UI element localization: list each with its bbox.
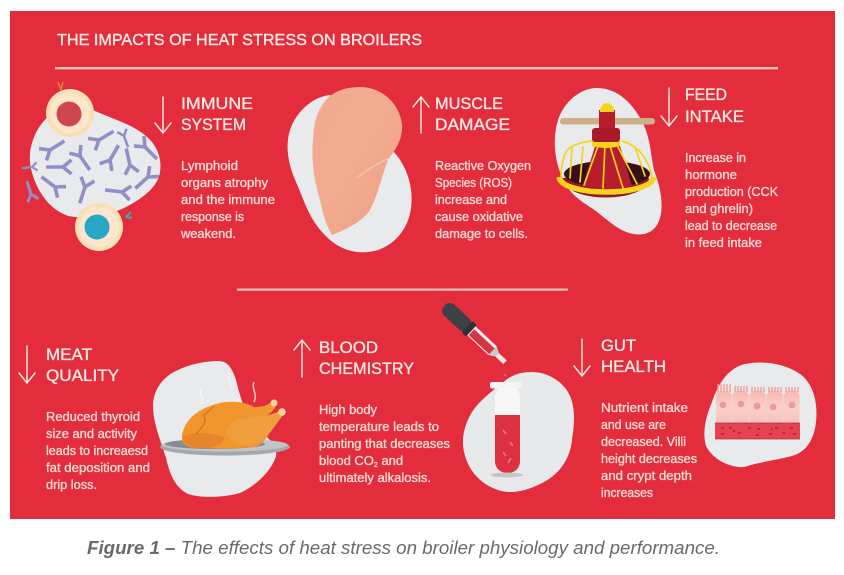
body text — [435, 159, 531, 241]
heading — [181, 95, 253, 134]
body text: leads to increaesd — [46, 444, 148, 458]
heading: QUALITY — [46, 367, 119, 385]
arrow up — [413, 97, 429, 133]
body text: High body — [319, 403, 378, 417]
body text: organs atrophy — [181, 176, 269, 190]
panel: immune system — [21, 82, 275, 251]
panel: feed intake — [555, 86, 779, 250]
body text: and use are — [601, 418, 666, 432]
body text: and crypt depth — [601, 469, 692, 483]
arrow down — [661, 88, 677, 126]
heading: INTAKE — [685, 108, 744, 126]
body text: drip loss. — [46, 478, 97, 492]
heading — [46, 346, 119, 385]
body text: height decreases — [601, 452, 697, 466]
heading: DAMAGE — [435, 116, 510, 134]
heading: HEALTH — [601, 358, 666, 376]
heading: SYSTEM — [181, 116, 246, 134]
heading: IMMUNE — [181, 95, 253, 113]
body text: temperature leads to — [319, 420, 439, 434]
body text: 2 — [374, 462, 378, 469]
body text: cause oxidative — [435, 210, 523, 224]
body text: ultimately alkalosis. — [319, 471, 431, 485]
body text: Increase in — [685, 151, 746, 165]
arrow down — [19, 346, 35, 383]
arrow down — [574, 339, 590, 376]
body text: weakend. — [180, 227, 236, 241]
heading: GUT — [601, 337, 636, 355]
body text: Species (ROS) — [435, 176, 512, 190]
illustration: poultry feeder — [555, 88, 662, 234]
heading: MUSCLE — [435, 95, 503, 113]
panel: meat quality — [19, 346, 290, 497]
body text: increases — [601, 486, 653, 500]
body text: Nutrient intake — [601, 401, 688, 415]
body text: and the immune — [181, 193, 275, 207]
heading — [435, 95, 510, 134]
body text — [319, 403, 450, 485]
heading — [685, 86, 744, 126]
body text: blood CO — [319, 453, 374, 468]
body text: decreased. Villi — [601, 435, 686, 449]
illustration: test tube and dropper — [439, 300, 574, 492]
heading: FEED — [685, 86, 727, 104]
body text: damage to cells. — [435, 227, 528, 241]
body text: in feed intake — [685, 236, 762, 250]
body text — [46, 410, 150, 492]
body text: and — [378, 453, 403, 468]
body text — [601, 401, 697, 500]
caption: Figure 1 – The effects of heat stress on broiler physiology and performance. — [87, 538, 720, 558]
panel: muscle damage — [288, 87, 531, 252]
body text: lead to decrease — [685, 219, 777, 233]
body text: Reduced thyroid — [46, 410, 140, 424]
body text: Lymphoid — [181, 159, 238, 173]
heading: BLOOD — [319, 339, 378, 357]
heading: MEAT — [46, 346, 92, 364]
arrow up — [294, 340, 310, 377]
title: THE IMPACTS OF HEAT STRESS ON BROILERS — [57, 32, 422, 49]
illustration: chicken breast — [288, 87, 412, 252]
body text — [180, 159, 275, 241]
body text: production (CCK — [685, 185, 779, 199]
heading — [601, 337, 666, 376]
body text — [685, 151, 779, 250]
body text: hormone — [685, 168, 737, 182]
body text: increase and — [435, 193, 507, 207]
body text: size and activity — [46, 427, 138, 441]
body text: fat deposition and — [46, 461, 150, 475]
body text: Reactive Oxygen — [435, 159, 531, 173]
heading — [319, 339, 414, 378]
panel: gut health — [574, 337, 816, 500]
panel: blood chemistry — [294, 300, 574, 492]
illustration: intestinal villi cells — [704, 362, 816, 467]
heading: CHEMISTRY — [319, 360, 414, 378]
body text: and ghrelin) — [685, 202, 753, 216]
body text: panting that decreases — [319, 437, 450, 451]
illustration: antibodies and immune cells — [21, 82, 162, 251]
arrow down — [155, 97, 171, 133]
body text: response is — [181, 210, 244, 224]
illustration: roast chicken on plate — [153, 361, 290, 497]
